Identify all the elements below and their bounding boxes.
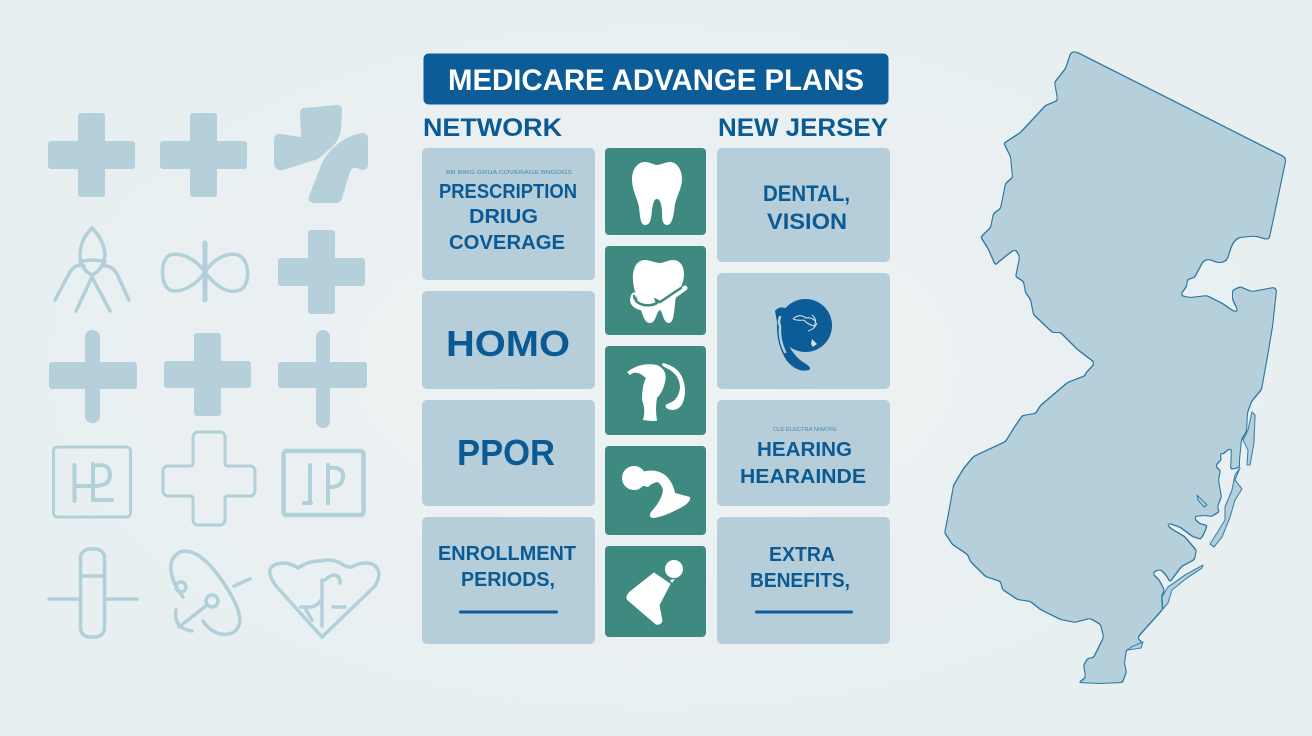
panel: dental vision: VISION <box>767 209 847 234</box>
panel: extra benefits: EXTRA <box>769 544 835 566</box>
panel: blue ear/globe icon <box>717 273 890 389</box>
icon: cross 3 <box>278 230 365 314</box>
icon: HP box 2 <box>284 451 364 515</box>
panel: HOMO: HOMO <box>446 323 570 364</box>
title: MEDICARE ADVANGE PLANS <box>448 64 864 97</box>
heading: new jersey: NEW JERSEY <box>718 114 888 142</box>
icon: capsule with line <box>49 549 137 637</box>
icon: outlined cross <box>163 432 255 525</box>
icon: thin cross 2 <box>278 330 367 428</box>
panel: prescription drug coverage: COVERAGE <box>449 232 565 254</box>
panel: enrollment periods: PERIODS, <box>461 569 555 591</box>
map: New Jersey <box>944 51 1286 684</box>
panel: extra benefits <box>717 517 890 644</box>
icon: infinity with bar <box>162 243 248 300</box>
icon: cross 2 <box>160 113 247 197</box>
panel: dental vision: DENTAL, <box>763 181 850 206</box>
panel: bell icon tile <box>605 546 706 637</box>
panel: prescription drug coverage: PRESCRIPTION <box>439 181 577 203</box>
icon: outline line figure <box>55 228 129 311</box>
panel: tooth with band icon tile <box>605 246 706 335</box>
panel: prescription drug coverage <box>422 148 595 280</box>
panel: prescription drug coverage: BB BIRG GRUA COVERAGE BNGOGS <box>446 170 572 176</box>
panel: dental vision <box>717 148 890 262</box>
panel: enrollment periods: ENROLLMENT <box>438 543 576 565</box>
panel: hearing: HEARING <box>757 439 852 461</box>
panel: tooth icon tile <box>605 148 706 235</box>
icon: HP box 1 <box>54 447 130 517</box>
icon: stethoscope loop <box>171 551 250 634</box>
panel: HOMO <box>422 291 595 389</box>
icon: split cross <box>274 105 368 203</box>
panel: prescription drug coverage: DRIUG <box>469 206 538 228</box>
icon: cross 4 <box>164 333 251 416</box>
icon: thin cross 1 <box>49 330 137 423</box>
icon: cross 1 <box>48 113 135 197</box>
header banner <box>424 54 888 104</box>
panel: decorative medical icon grid <box>48 105 379 637</box>
panel: hearing aid icon tile <box>605 446 706 535</box>
panel: enrollment periods <box>422 517 595 644</box>
panel: hearing: CLE ELECTRA NIWOFE <box>773 427 837 433</box>
panel: extra benefits: BENEFITS, <box>750 570 850 592</box>
heading: network: NETWORK <box>423 114 562 142</box>
icon: heart outline <box>270 560 379 637</box>
panel: PPOR: PPOR <box>457 432 555 473</box>
panel: PPOR <box>422 400 595 506</box>
map: coastal barrier islands <box>1128 412 1255 650</box>
panel: hearing: HEARAINDE <box>740 466 866 488</box>
panel: ear icon tile <box>605 346 706 435</box>
panel: hearing <box>717 400 890 506</box>
